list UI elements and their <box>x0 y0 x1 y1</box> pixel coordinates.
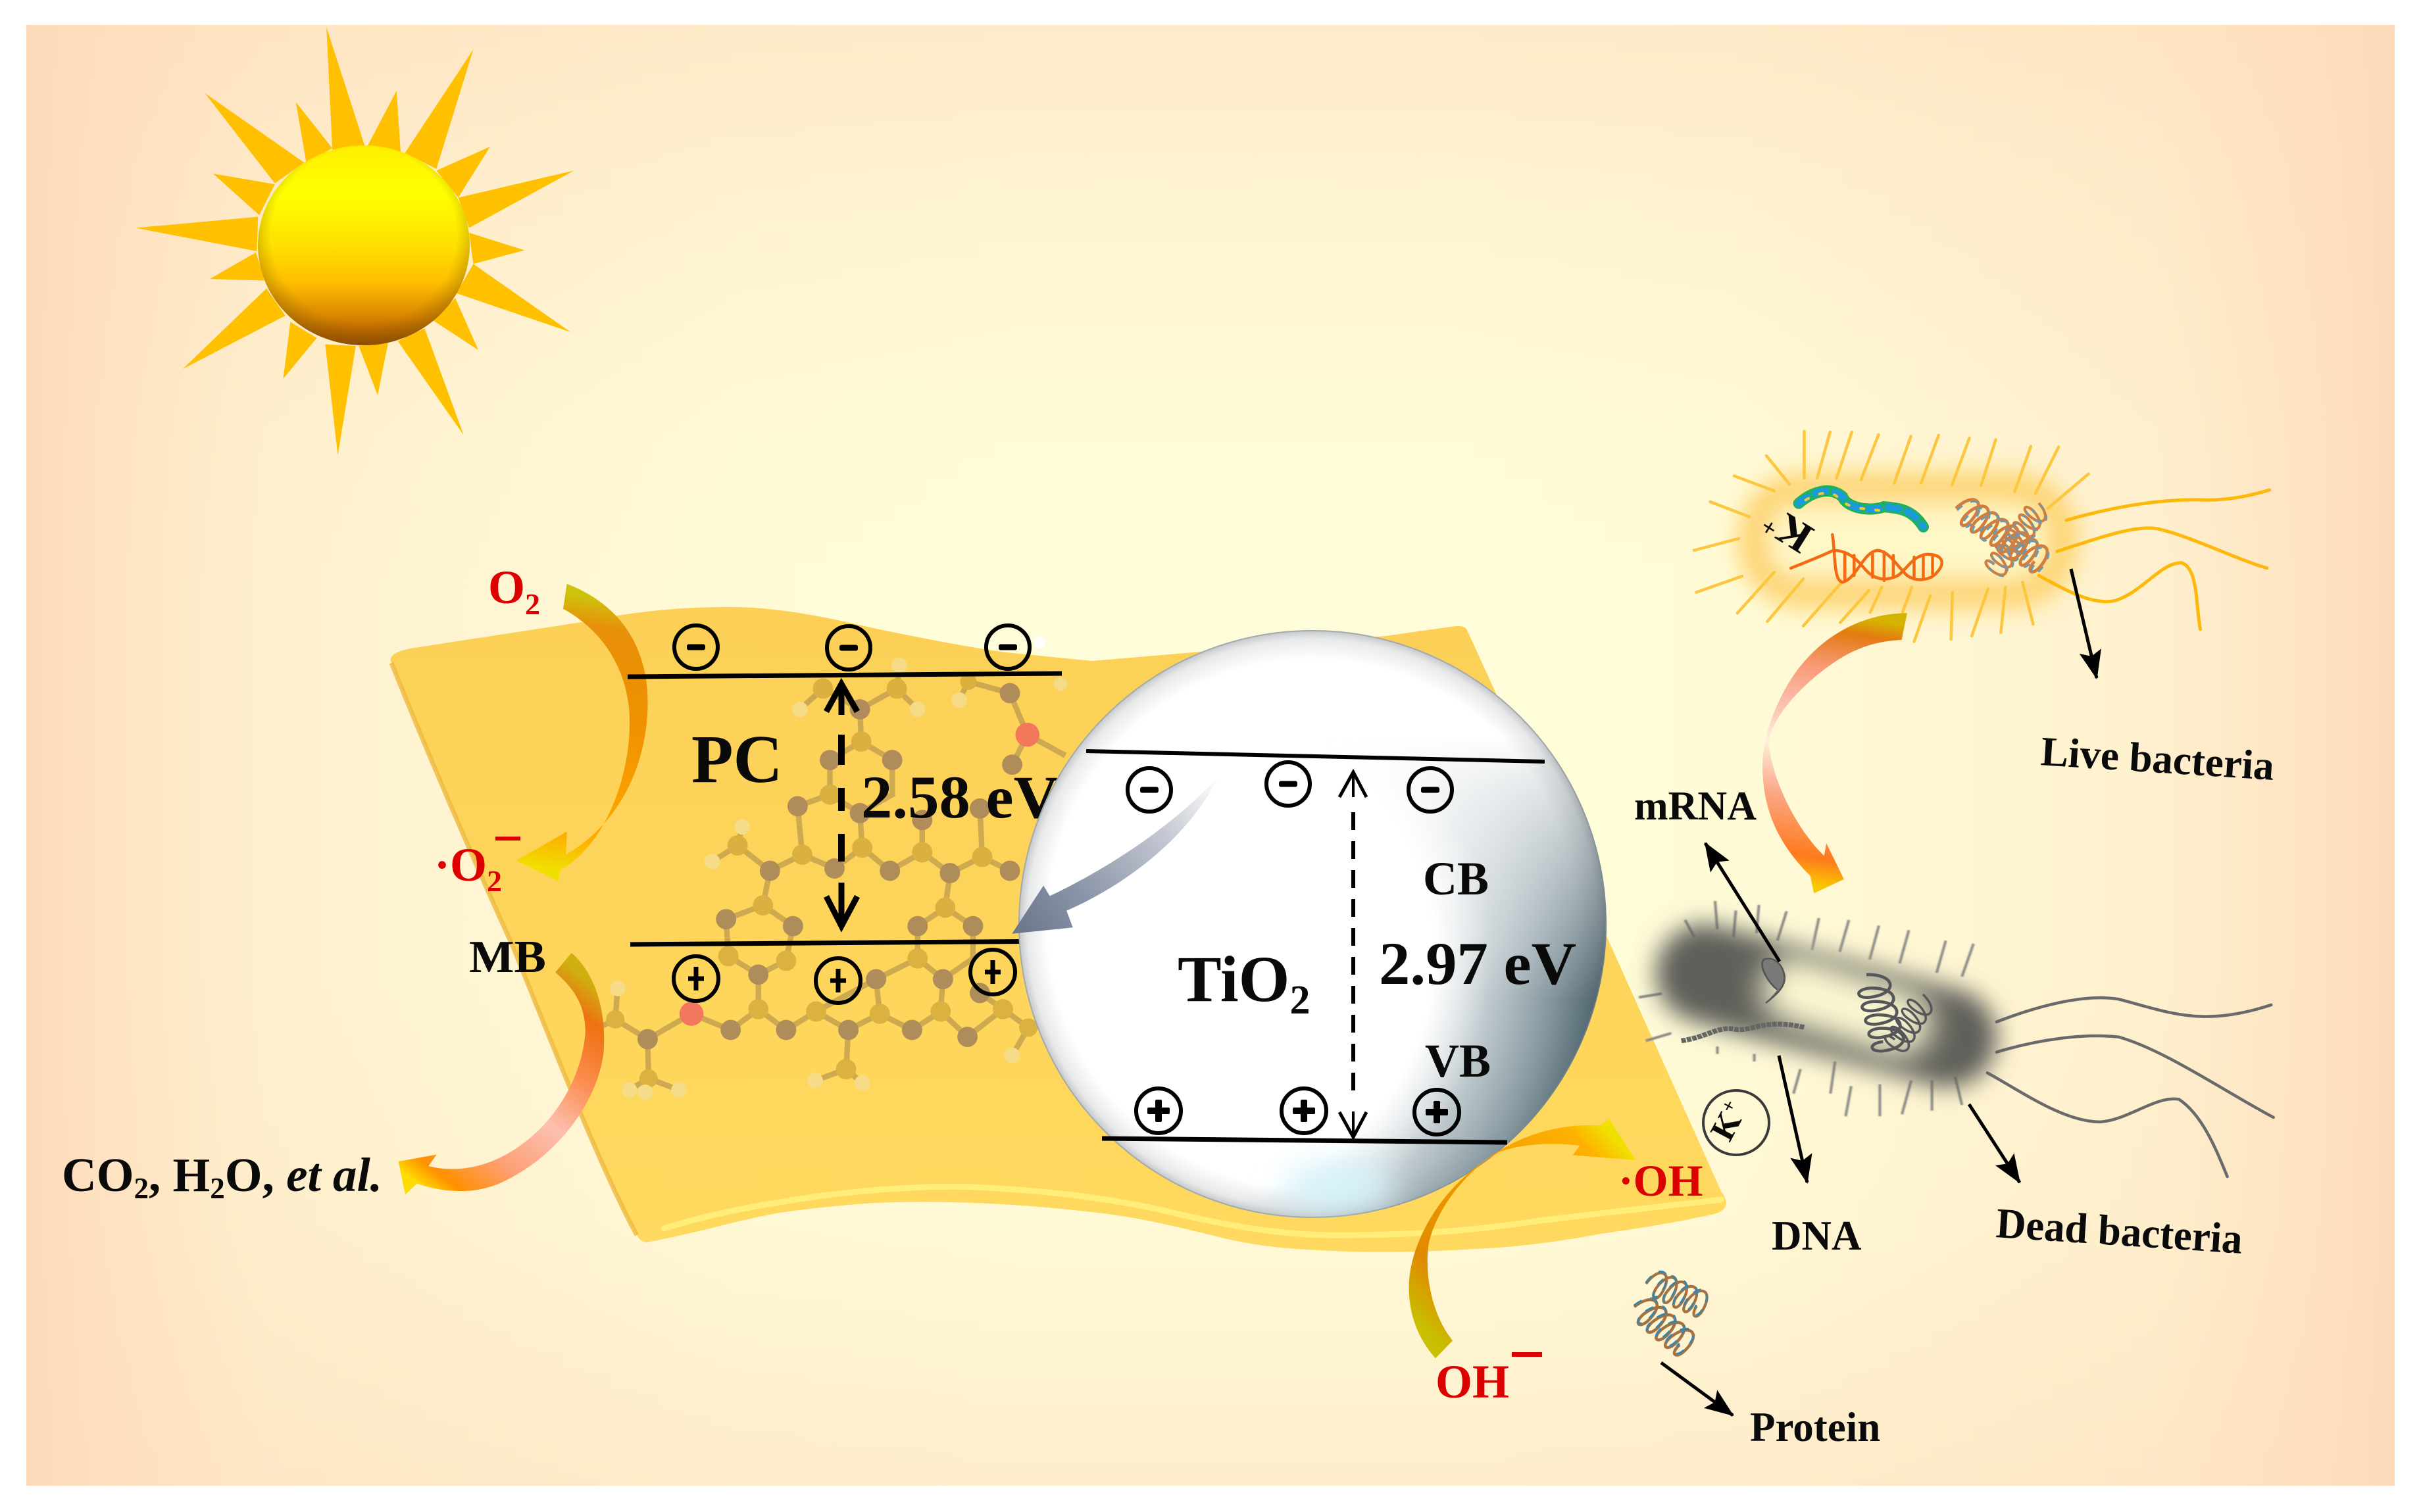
CB label: CB <box>1423 852 1489 905</box>
label: hydroxide: OH <box>1435 1355 1509 1408</box>
PC valence band line <box>630 941 1064 944</box>
label: degradation products: 2 <box>134 1172 149 1205</box>
plate bottom highlight <box>664 1186 1721 1235</box>
label: degradation products: CO <box>62 1148 134 1202</box>
TiO2 band gap dashed arrow <box>1339 772 1366 1137</box>
dead bacterium pili <box>1639 901 1974 1116</box>
sphere lower right shading <box>1262 750 1607 1218</box>
label: DNA: DNA <box>1772 1213 1862 1259</box>
TiO2 conduction band line <box>1086 751 1545 762</box>
live bacterium potassium label: + <box>1756 512 1783 543</box>
live bacterium pili <box>1694 431 2089 642</box>
label: degradation products: 2 <box>210 1172 225 1205</box>
dead bacterium cell body <box>1705 973 1947 1038</box>
brown carbon atoms <box>586 683 1022 1050</box>
live bacterium DNA <box>1791 535 1942 582</box>
label: live bacteria: Live bacteria <box>2039 728 2276 789</box>
label: mRNA: mRNA <box>1634 784 1757 829</box>
live bacterium protein ribbon <box>1799 491 1924 527</box>
dead bacterium cell interior <box>1796 990 1898 1023</box>
PC conduction band line <box>628 673 1062 677</box>
dead bacterium potassium label: K <box>1703 1106 1749 1147</box>
live bacterium <box>1694 431 2270 642</box>
sun disc <box>258 145 470 345</box>
plate left rim shade <box>391 663 637 1235</box>
dead bacterium <box>1639 901 2274 1177</box>
live bacterium cell glow <box>1753 488 2062 593</box>
icon: sun <box>136 27 574 455</box>
molecule: PC structure <box>586 658 1068 1100</box>
TiO2 label: TiO <box>1178 942 1289 1015</box>
label: degradation products: , H <box>149 1148 210 1202</box>
label: degradation products: O, <box>225 1148 286 1202</box>
icon: free protein coil <box>1628 1267 1710 1358</box>
PC band gap value: 2.58 eV <box>861 764 1059 831</box>
label: hydroxide <box>1435 1352 1542 1408</box>
live bacterium flagella <box>2039 490 2270 629</box>
TiO2 label: 2 <box>1289 978 1310 1023</box>
plate: PC sheet <box>391 607 1726 1252</box>
label: degradation products: et al. <box>286 1148 382 1202</box>
live bacterium potassium label: K <box>1767 504 1821 562</box>
label: superoxide radical <box>434 837 520 898</box>
arrow: to dead bacteria <box>1969 1104 2020 1183</box>
arrow: MB to degradation products <box>399 953 604 1194</box>
dead bacterium potassium label <box>1703 1090 1769 1155</box>
gold carbon atoms <box>606 673 1037 1088</box>
dead bacterium potassium label: + <box>1716 1096 1741 1116</box>
dead bacterium flagella <box>1987 998 2274 1177</box>
PC label: PC <box>691 721 783 797</box>
arrow: electron-hole attack on bacteria <box>1762 613 1907 893</box>
arrow: O2 to superoxide <box>516 584 648 881</box>
label: O2: O <box>488 561 525 614</box>
arrow: electron transfer TiO2 to PC <box>1012 777 1218 934</box>
dead bacterium DNA fragment <box>1682 1024 1805 1040</box>
label: superoxide radical: ·O <box>434 839 487 891</box>
label: hydroxyl radical: ·OH <box>1618 1156 1703 1206</box>
VB label: VB <box>1425 1035 1491 1087</box>
dead bacterium protein coils <box>1855 969 1937 1054</box>
label: superoxide radical: 2 <box>487 864 502 898</box>
arrow: to protein <box>1661 1363 1733 1415</box>
dead bacterium mRNA <box>1762 959 1785 1003</box>
PC electrons <box>674 625 1045 670</box>
TiO2 valence band line <box>1102 1138 1507 1142</box>
arrow: to live bacteria <box>2071 569 2097 678</box>
arrow: to mRNA <box>1705 843 1780 962</box>
oxygen atoms <box>680 723 1039 1026</box>
sun rays <box>136 27 574 455</box>
TiO2 holes <box>1136 1088 1459 1134</box>
TiO2 electrons <box>1128 762 1452 812</box>
live bacterium protein coils <box>1950 494 2053 579</box>
PC band gap dashed arrow <box>826 684 857 926</box>
label: O2: 2 <box>525 587 540 621</box>
TiO2 sphere <box>1013 625 1618 1223</box>
hydrogen atoms <box>610 658 1068 1100</box>
label: dead bacteria: Dead bacteria <box>1995 1200 2244 1263</box>
molecule bonds <box>595 666 1065 1090</box>
PC holes <box>674 950 1015 1003</box>
label: protein: Protein <box>1750 1404 1880 1450</box>
arrow: to DNA <box>1779 1056 1807 1183</box>
TiO2 band gap value: 2.97 eV <box>1379 930 1576 997</box>
label: MB: MB <box>469 932 546 983</box>
arrow: OH- to OH radical <box>1409 1119 1635 1358</box>
